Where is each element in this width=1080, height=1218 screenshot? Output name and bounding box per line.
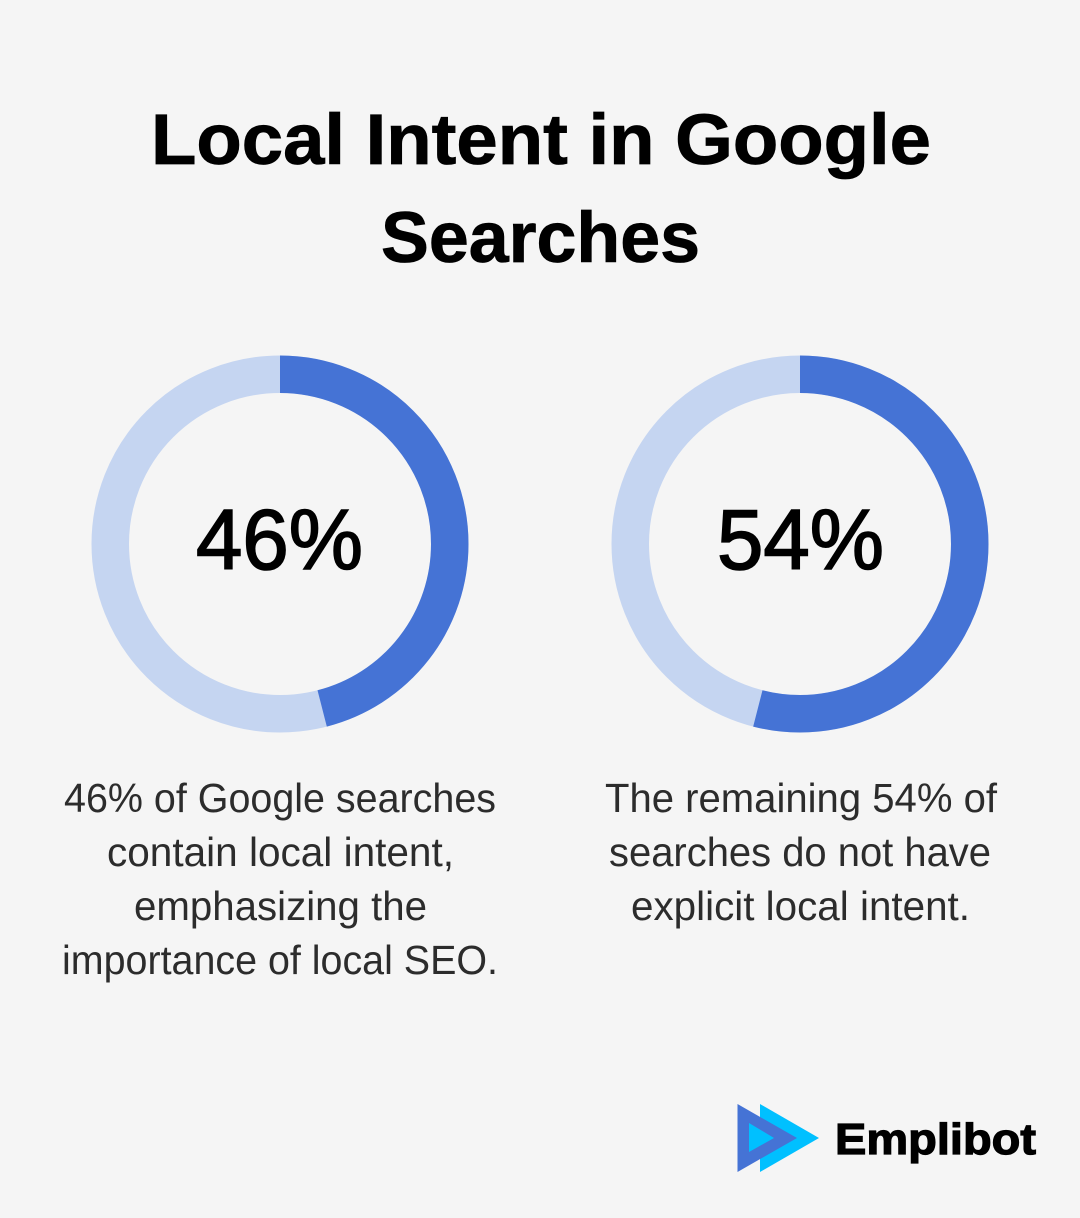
donut value: 54%: 54% <box>717 493 884 588</box>
description: 46%: importance of local SEO. <box>62 937 498 983</box>
logo wordmark: Emplibot <box>835 1115 1036 1164</box>
panel: 54% no local intent <box>605 374 998 929</box>
panel: 46% local intent <box>62 374 498 983</box>
donut chart: 46% <box>110 374 450 714</box>
description: 46%: contain local intent, <box>107 829 454 875</box>
description: 46%: emphasizing the <box>134 883 427 929</box>
description: 54%: explicit local intent. <box>631 883 970 929</box>
description: 46%: 46% of Google searches <box>64 775 496 821</box>
title: Local Intent in Google <box>151 101 931 180</box>
donut value: 46%: 46% <box>196 493 363 588</box>
description: 54% <box>605 775 998 929</box>
title: Searches <box>381 199 700 278</box>
description: 54%: The remaining 54% of <box>605 775 998 821</box>
description: 46% <box>62 775 498 983</box>
logo: Emplibot <box>738 1104 1036 1172</box>
title <box>151 101 931 278</box>
description: 54%: searches do not have <box>609 829 991 875</box>
icon: play triangles <box>738 1104 819 1172</box>
donut chart: 54% <box>630 374 970 714</box>
